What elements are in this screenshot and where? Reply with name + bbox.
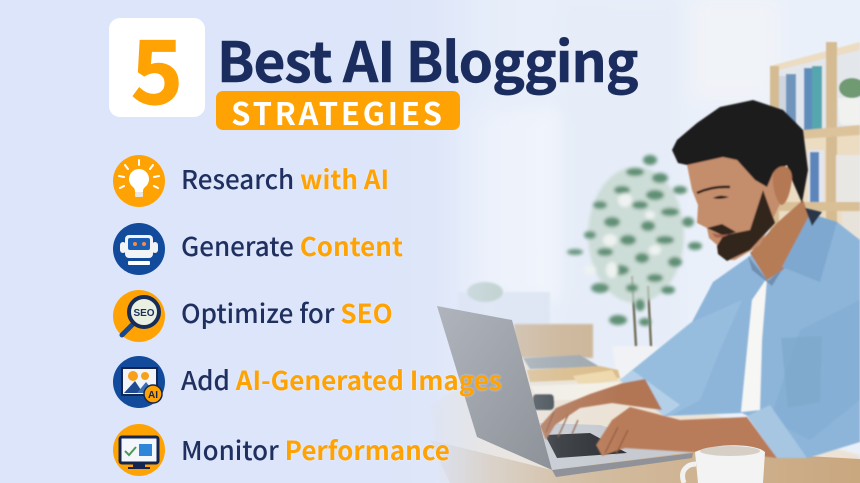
- hair: [672, 100, 808, 203]
- number badge: 5: [131, 3, 183, 130]
- icon: image on monitor: AI: [148, 390, 158, 401]
- row text: generate: Generate Content: [181, 227, 403, 264]
- ear: [773, 166, 792, 205]
- heading: Best AI Blogging: [217, 18, 638, 98]
- icon: SEO magnifier: SEO: [133, 308, 155, 319]
- potted plant: [567, 155, 702, 384]
- row text: monitor: Monitor Performance: [181, 431, 450, 468]
- subheading pill: STRATEGIES: [231, 89, 445, 134]
- shirt: [620, 212, 860, 458]
- face: [687, 150, 782, 261]
- neck: [750, 200, 813, 280]
- row text: optimize: Optimize for SEO: [181, 294, 393, 331]
- sideboard and small plant: [458, 282, 593, 358]
- icon: image on monitor: [113, 356, 165, 408]
- row text: research: Research with AI: [181, 160, 389, 197]
- icon: monitor dashboard: [113, 424, 165, 476]
- icon: robot: [113, 223, 165, 275]
- wall and window: [455, 0, 780, 370]
- desk: [430, 357, 860, 483]
- t-shirt: [741, 278, 767, 412]
- icon: SEO magnifier: [113, 290, 165, 342]
- bookshelf: [770, 42, 860, 240]
- coffee mug: [683, 445, 765, 483]
- laptop base and keyboard: [540, 423, 693, 470]
- arms and hands: [540, 379, 777, 458]
- icon: light bulb: [113, 155, 165, 207]
- number badge: [109, 18, 205, 117]
- title block: [109, 3, 638, 134]
- collar: [748, 208, 837, 286]
- man: [540, 100, 860, 458]
- desk items: tablet, books, notebook: [523, 355, 620, 410]
- row text: images: Add AI-Generated Images: [181, 361, 502, 398]
